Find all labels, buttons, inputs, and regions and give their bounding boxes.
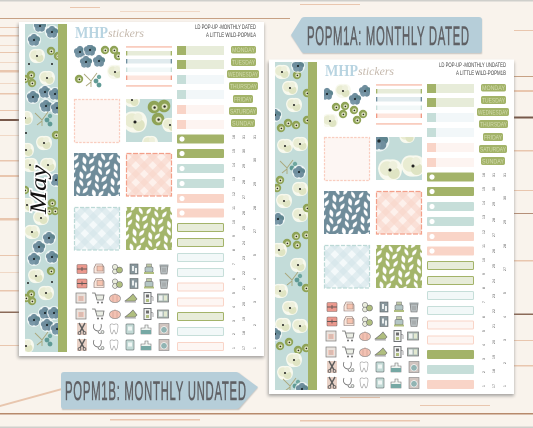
sheet title: LD POP-UP -MONTHLY DATED [195,24,256,31]
date numbers: 15 [232,149,236,153]
weekday stickers: THURSDAY [230,84,257,90]
tile: striped labels [126,46,172,87]
date numbers: 31 [503,173,507,177]
date numbers: 8 [482,287,486,289]
date numbers: 10 [232,220,236,224]
date numbers: 13 [232,177,236,181]
date numbers: 19 [242,317,246,321]
tile: white floral [74,45,120,88]
date numbers: 9 [232,235,236,237]
logo: MHP [75,23,108,42]
date numbers: 14 [232,163,236,167]
date numbers: 9 [482,273,486,275]
date numbers: 4 [503,316,507,318]
icon stickers grid [326,302,419,389]
sheet title: A LITTLE WILD-POPM1A [206,32,256,39]
weekday stickers: MONDAY [482,85,505,92]
date numbers: 31 [492,173,496,177]
sheet paper and shadow [268,60,514,396]
date numbers: 17 [242,346,246,350]
date numbers: 13 [482,215,486,219]
sheet title: A LITTLE WILD-POPM1B [456,70,506,77]
date numbers: 20 [242,302,246,306]
weekday stickers: SATURDAY [480,146,506,154]
weekday stickers: THURSDAY [480,122,507,128]
tile: teal floral [376,137,422,180]
date numbers: 18 [492,369,496,373]
date numbers: 10 [482,258,486,262]
date numbers: 6 [232,278,236,280]
date numbers: 5 [503,292,507,294]
tile: pink gingham [126,154,172,196]
date numbers: 30 [492,187,496,191]
logo [325,61,394,80]
logo: stickers [108,26,144,40]
date numbers: 17 [492,384,496,388]
date numbers: 7 [232,263,236,265]
tile: white floral [324,84,370,127]
weekday stickers: FRIDAY [484,134,502,142]
weekday stickers: WEDNESDAY [478,110,508,116]
date numbers: 1 [232,347,236,349]
sheet paper and shadow [18,22,264,358]
date numbers: 28 [242,180,246,184]
date numbers: 28 [492,218,496,222]
date numbers: 26 [242,211,246,215]
date numbers: 11 [232,206,236,210]
date numbers: 26 [492,249,496,253]
date numbers: 22 [492,309,496,313]
tile: pink dashed [74,100,120,142]
date numbers: 27 [492,233,496,237]
date numbers: 7 [482,301,486,303]
date numbers: 24 [242,241,246,245]
date numbers: 3 [232,320,236,322]
date numbers: 2 [482,371,486,373]
date numbers: 30 [253,158,257,162]
sticker sheet: monthly undated [268,59,514,396]
weekday stickers [477,84,509,166]
tile: blue gingham [74,208,120,250]
date numbers: 31 [242,135,246,139]
date numbers: 21 [242,286,246,290]
date numbers: 20 [492,340,496,344]
date numbers: 11 [482,244,486,248]
date numbers: 19 [492,355,496,359]
floral side strip [25,24,58,352]
date numbers: 1 [503,385,507,387]
sheet title [195,24,256,39]
weekday stickers: SUNDAY [232,120,254,128]
tile: striped labels [376,84,422,125]
logo: stickers [358,64,394,78]
green side bar [308,62,317,390]
tile: blue leaves [324,191,370,234]
date numbers: 8 [232,249,236,251]
weekday stickers: WEDNESDAY [228,72,258,78]
date numbers: 15 [482,187,486,191]
date numbers: 16 [482,173,486,177]
date numbers: 27 [503,267,507,271]
weekday stickers: FRIDAY [234,96,252,104]
date numbers: 30 [242,149,246,153]
date numbers: 24 [492,279,496,283]
logo [75,23,144,42]
tile: blue leaves [74,153,120,196]
date numbers: 3 [253,301,257,303]
date numbers: 25 [492,264,496,268]
tile: green leaves [376,245,422,288]
date numbers: 5 [232,292,236,294]
date numbers: 3 [482,358,486,360]
green side bar [58,24,67,352]
date numbers: 5 [253,254,257,256]
date numbers: 28 [503,244,507,248]
date numbers: 23 [492,294,496,298]
weekday stickers: TUESDAY [482,98,505,104]
date numbers: 29 [492,202,496,206]
banner: monthly dated [291,17,482,54]
banner: monthly undated: POPM1B: MONTHLY UNDATED [65,377,246,407]
icon stickers grid [76,264,169,351]
date numbers: 22 [242,271,246,275]
floral side strip [275,62,308,390]
logo: MHP [325,61,358,80]
date numbers: 2 [503,362,507,364]
date numbers: 2 [253,324,257,326]
date numbers [232,135,257,350]
date numbers: 12 [482,230,486,234]
weekday stickers [227,46,259,128]
date numbers: 27 [253,229,257,233]
date numbers: 4 [253,278,257,280]
label strips column [177,46,224,350]
date numbers: 5 [482,330,486,332]
date numbers: 3 [503,339,507,341]
date numbers: 28 [253,206,257,210]
date numbers: 21 [492,324,496,328]
date numbers: 23 [242,256,246,260]
date numbers: 29 [253,182,257,186]
month label: May [26,164,51,215]
tile: green leaves [126,207,172,250]
date numbers: 14 [482,201,486,205]
label strips column [427,84,474,389]
date numbers: 4 [232,306,236,308]
weekday stickers: SUNDAY [482,158,504,166]
date numbers: 12 [232,192,236,196]
tile: teal floral [126,99,172,142]
date numbers: 29 [242,164,246,168]
date numbers: 4 [482,344,486,346]
tile: pink dashed [324,138,370,180]
weekday stickers: TUESDAY [232,60,255,66]
date numbers: 18 [242,331,246,335]
date numbers: 6 [482,316,486,318]
date numbers: 16 [232,135,236,139]
date numbers: 2 [232,333,236,335]
date numbers: 27 [242,195,246,199]
banner: monthly dated: POPM1A: MONTHLY DATED [307,22,469,52]
weekday stickers: SATURDAY [230,108,256,116]
date numbers: 31 [253,135,257,139]
weekday stickers: MONDAY [232,47,255,54]
date numbers: 1 [482,385,486,387]
sheet title [439,62,506,77]
tile: blue gingham [324,246,370,288]
date numbers [482,173,507,388]
date numbers: 1 [253,347,257,349]
date numbers: 30 [503,196,507,200]
tile: pink gingham [376,192,422,234]
date numbers: 25 [242,226,246,230]
date numbers: 29 [503,220,507,224]
sticker sheet: monthly dated [17,19,264,358]
